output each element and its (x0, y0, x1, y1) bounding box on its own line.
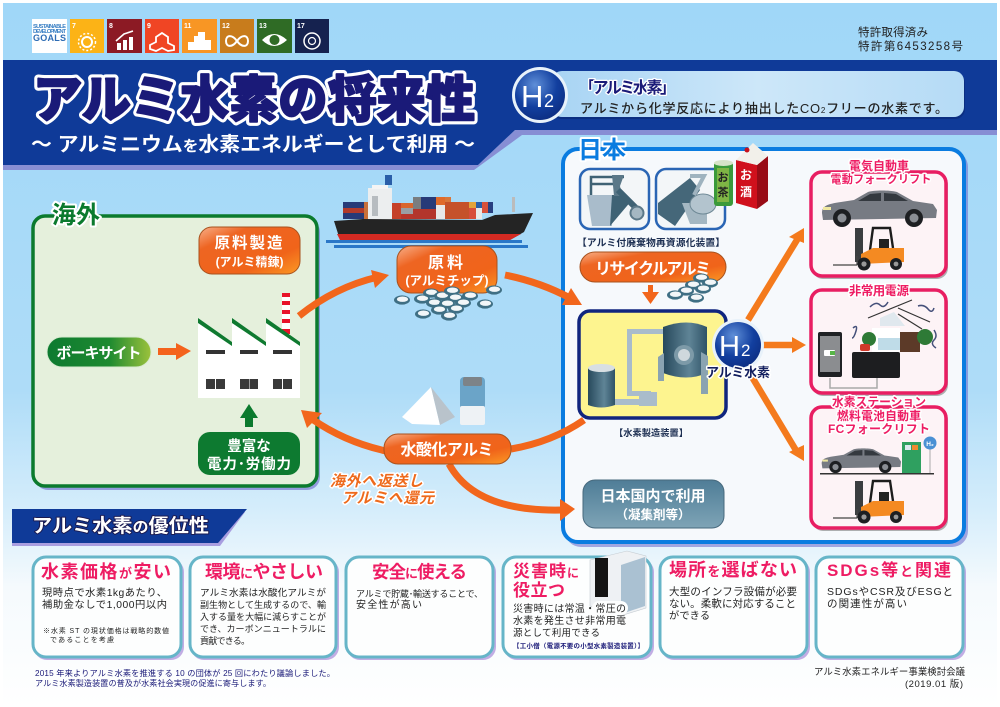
advantage card: low price (33, 557, 184, 660)
advantage card: low price: 水素価格が安い (41, 562, 171, 582)
advantage card: environment: でき、カーボンニュートラルに (200, 624, 326, 634)
aluminium hydroxide label: 水酸化アルミ (400, 441, 494, 459)
SDGs icons: 9 (147, 23, 151, 30)
cargo ship (326, 175, 533, 248)
hydrogen unit caption: 【水素製造装置】 (614, 427, 688, 438)
card: hydrogen station: 燃料電池自動車 (837, 409, 921, 423)
card: electric vehicles: 電気自動車 (849, 158, 909, 173)
recycling machine caption: 【アルミ付廃棄物再資源化装置】 (577, 236, 725, 249)
SDGs icons: 7 (72, 23, 76, 30)
callout: aluminium hydrogen definition (512, 67, 965, 123)
footnote right: アルミ水素エネルギー事業検討会議 (814, 666, 966, 677)
advantage card: environment: 副生物として生成するので、輸 (200, 599, 326, 610)
footnote left: アルミ水素製造装置の普及が水素社会実現の促進に寄与します。 (35, 678, 271, 688)
card: emergency power: 非常用電源 (849, 283, 909, 298)
advantage card: low price: 補助金なしで1,000円以内 (42, 598, 167, 611)
advantage card: disaster: 役立つ (513, 581, 565, 600)
advantage card: low price: であることを考慮 (50, 635, 114, 644)
card: hydrogen station (811, 395, 948, 531)
footnote left (35, 668, 335, 688)
SDGs icons: 17 (297, 23, 305, 30)
note: return overseas: 海外へ返送し (330, 473, 423, 490)
sake carton: お (740, 168, 752, 182)
advantage card: safe: アルミで貯蔵･輸送することで、 (356, 588, 483, 599)
advantage card: disaster: 源として利用できる (513, 627, 600, 639)
SDGs icons: 13 (259, 23, 267, 30)
advantage card: any location: 場所を選ばない (669, 560, 797, 580)
SDGs icons (32, 19, 329, 53)
card: emergency power (811, 283, 948, 396)
advantage card: safe: 安全に使える (372, 562, 467, 582)
advantage card: disaster: 水素を発生させ非常用電 (513, 614, 626, 627)
advantage card: disaster (503, 551, 654, 660)
advantage card: any location (660, 557, 810, 660)
raw material label: 原料 (428, 254, 466, 272)
advantage card: low price: 現時点で水素1kgあたり、 (42, 586, 167, 599)
aluminium chips (394, 285, 502, 321)
domestic use label: （凝集剤等） (615, 507, 691, 522)
advantage card: SDGs (816, 557, 966, 660)
abundant power and labour label (198, 432, 300, 475)
raw material label: (アルミチップ) (405, 274, 489, 288)
advantage card: environment: 入する量を大幅に減らすことが (200, 611, 326, 622)
advantage card: disaster: 【工小僧（電源不要の小型水素製造装置）】 (513, 641, 644, 650)
patent note (858, 25, 963, 53)
arrows: hydrogen to applications (748, 228, 806, 461)
card: electric vehicles: 電動フォークリフト (830, 172, 932, 186)
aluminium hydrogen badge: アルミ水素 (706, 365, 770, 380)
advantage card: any location: ない。柔軟に対応すること (669, 597, 796, 610)
callout: aluminium hydrogen definition: アルミから化学反応により抽出したCO2フリーの水素です。 (580, 101, 948, 116)
advantage card: disaster: 災害時には常温・常圧の (513, 602, 626, 615)
hydrogen production unit (579, 311, 726, 418)
advantage card: any location: 大型のインフラ設備が必要 (669, 585, 798, 598)
header band (3, 60, 997, 170)
subtitle: ～ アルミニウム を水素エネルギーとして利用 ～ (31, 133, 475, 156)
patent note: 特許取得済み (858, 25, 928, 39)
aluminium hydrogen badge (706, 319, 770, 380)
portable hydrogen power unit (830, 352, 900, 388)
advantage card: environment: 環境にやさしい (205, 562, 323, 582)
arrow: bauxite to factory (158, 343, 191, 360)
domestic use label: 日本国内で利用 (600, 488, 706, 505)
recycled chips (667, 273, 718, 303)
card: hydrogen station: 水素ステーション (832, 395, 926, 409)
arrow: recycled aluminium to unit (642, 285, 659, 304)
advantages heading (12, 509, 247, 546)
footnote right (814, 666, 966, 690)
panel: Japan (563, 137, 968, 547)
bauxite label (47, 337, 151, 367)
sake carton: 酒 (740, 184, 752, 199)
overseas heading: 海外 (52, 202, 100, 229)
advantage card: safe (346, 557, 496, 660)
arrow: power to factory (240, 404, 258, 427)
advantages heading: アルミ水素 の優位性 (32, 515, 209, 537)
advantage card: SDGs: SDGsやCSR及びESGと (827, 586, 953, 598)
green tea can: お (718, 171, 728, 184)
footnote right: (2019.01 版) (905, 678, 963, 690)
card: hydrogen station: H₂ (926, 441, 934, 448)
note: return overseas: アルミへ還元 (341, 490, 436, 507)
callout: aluminium hydrogen definition: 2 (544, 91, 554, 111)
green tea can: 茶 (718, 185, 728, 199)
abundant power and labour label: 電力･労働力 (207, 456, 291, 473)
green tea can (714, 160, 733, 206)
arrow: raw material to Japan (505, 275, 582, 305)
arrow: aluminium hydroxide to factory (301, 410, 386, 451)
title: アルミ水素の将来性 (33, 72, 475, 128)
advantage card: environment: 貢献できる。 (200, 635, 250, 646)
arrow: aluminium hydroxide to domestic use (449, 464, 575, 521)
recycled aluminium label: リサイクルアルミ (595, 260, 711, 278)
advantage card: disaster: 災害時に (513, 561, 579, 581)
domestic use label (583, 480, 724, 528)
arrow: factory to raw material (299, 270, 389, 316)
smartphone (818, 332, 842, 377)
SDGs icons: 11 (184, 23, 192, 30)
advantage card: safe: 安全性が高い (356, 598, 422, 611)
advantage card: low price: ※水素 ST の現状価格は戦略的数値 (43, 626, 169, 635)
aluminium hydrogen badge: H (719, 331, 740, 363)
Japan heading: 日本 (578, 137, 626, 164)
powder bottle (460, 377, 485, 425)
abundant power and labour label: 豊富な (227, 437, 271, 455)
raw material production label (199, 227, 300, 274)
card: electric vehicles (811, 158, 948, 279)
sake carton (736, 143, 768, 209)
card: hydrogen station: FCフォークリフト (828, 422, 930, 436)
bauxite label: ボーキサイト (56, 345, 142, 362)
advantage card: environment: アルミ水素は水酸化アルミが (200, 587, 326, 599)
callout: aluminium hydrogen definition: 「アルミ水素」 (579, 79, 676, 97)
recycled aluminium label (580, 252, 726, 282)
advantage card: any location: ができる (669, 609, 710, 622)
title: アルミ水素の将来性 (33, 72, 475, 128)
note: return overseas (330, 473, 436, 507)
SDGs icons: DEVELOPMENT (33, 29, 67, 35)
recycling machine 1 (580, 169, 649, 229)
recycling machine 2 (656, 169, 725, 229)
footnote left: 2015 年来よりアルミ水素を推進する 10 の団体が 25 回にわたり議論しました。 (35, 668, 335, 678)
aluminium hydroxide label (384, 434, 511, 464)
patent note: 特許第6453258号 (858, 39, 963, 53)
callout: aluminium hydrogen definition: H (521, 79, 543, 114)
SDGs icons: 8 (109, 23, 113, 30)
advantage card: SDGs: の関連性が高い (827, 597, 907, 610)
raw material label (397, 246, 497, 293)
raw material production label: 原料製造 (214, 234, 285, 252)
advantage card: environment (190, 557, 339, 660)
SDGs icons: 12 (222, 23, 230, 30)
panel: overseas (33, 202, 320, 490)
SDGs icons: SUSTAINABLE (33, 24, 66, 30)
earthquake-damaged houses (852, 300, 936, 352)
factory (198, 293, 300, 398)
compact hydrogen generator (590, 551, 646, 616)
arrow: hydrogen unit to aluminium hydroxide (511, 420, 584, 449)
advantage card: SDGs: SDGs等と関連 (827, 560, 951, 580)
SDGs icons: GOALS (33, 33, 66, 43)
raw material production label: (アルミ精錬) (216, 254, 283, 269)
aluminium hydroxide powder (402, 387, 455, 425)
aluminium hydrogen badge: 2 (741, 341, 750, 360)
